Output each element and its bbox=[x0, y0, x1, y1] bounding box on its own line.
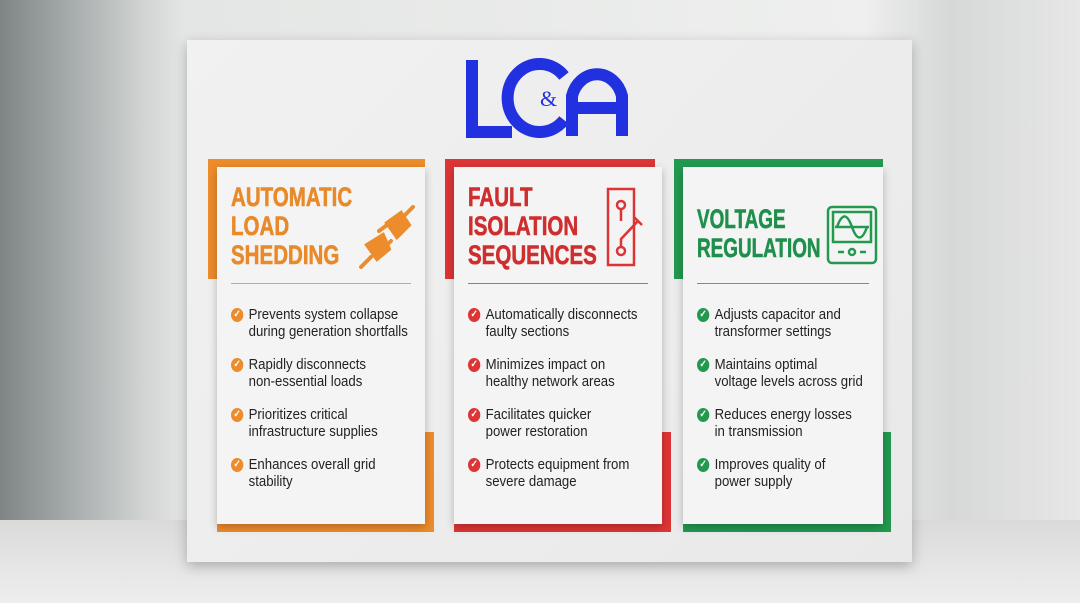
panel: automatic load shedding: non-essential loads bbox=[249, 373, 362, 390]
panel: automatic load shedding: Prioritizes critical bbox=[249, 406, 348, 423]
panel: voltage regulation: Improves quality of bbox=[715, 456, 825, 473]
panel: fault isolation sequences: Protects equipment from bbox=[486, 456, 629, 473]
panel: voltage regulation: voltage levels across grid bbox=[715, 373, 863, 390]
panel: fault isolation sequences: ✓ bbox=[470, 359, 478, 370]
panel: voltage regulation bbox=[674, 159, 891, 532]
panel: fault isolation sequences: Facilitates quicker bbox=[486, 406, 591, 423]
panel: automatic load shedding: during generation shortfalls bbox=[249, 323, 408, 340]
panel: fault isolation sequences: faulty sections bbox=[486, 323, 569, 340]
panel: automatic load shedding: Rapidly disconnects bbox=[249, 356, 366, 373]
panel: fault isolation sequences: severe damage bbox=[486, 473, 577, 490]
heading: FAULT bbox=[468, 182, 533, 212]
panel: voltage regulation: Adjusts capacitor and bbox=[715, 306, 841, 323]
heading: LOAD bbox=[231, 211, 289, 241]
panel: automatic load shedding: infrastructure supplies bbox=[249, 423, 378, 440]
heading: ISOLATION bbox=[468, 211, 578, 241]
heading: REGULATION bbox=[697, 233, 821, 263]
panel: voltage regulation: in transmission bbox=[715, 423, 803, 440]
panel: voltage regulation: ✓ bbox=[699, 309, 707, 320]
board bbox=[187, 40, 912, 562]
logo bbox=[466, 58, 628, 138]
icon: meter bbox=[826, 206, 878, 264]
panel: voltage regulation: ✓ bbox=[699, 459, 707, 470]
heading: VOLTAGE bbox=[697, 204, 786, 234]
panel: automatic load shedding: ✓ bbox=[233, 359, 241, 370]
heading: AUTOMATIC bbox=[231, 182, 352, 212]
panel: automatic load shedding: ✓ bbox=[233, 409, 241, 420]
panel: automatic load shedding: stability bbox=[249, 473, 293, 490]
panel: fault isolation sequences: ✓ bbox=[470, 459, 478, 470]
panel: automatic load shedding: ✓ bbox=[233, 309, 241, 320]
heading: SEQUENCES bbox=[468, 240, 597, 270]
panel: voltage regulation: power supply bbox=[715, 473, 792, 490]
icon: switch bbox=[606, 188, 643, 266]
heading bbox=[468, 182, 597, 270]
heading: SHEDDING bbox=[231, 240, 339, 270]
panel: automatic load shedding bbox=[208, 159, 434, 532]
panel: fault isolation sequences: power restoration bbox=[486, 423, 588, 440]
panel: fault isolation sequences: healthy network areas bbox=[486, 373, 615, 390]
panel: fault isolation sequences: ✓ bbox=[470, 409, 478, 420]
panel: voltage regulation: Reduces energy losses bbox=[715, 406, 852, 423]
panel: voltage regulation: transformer settings bbox=[715, 323, 831, 340]
heading bbox=[231, 182, 352, 270]
icon: plug bbox=[358, 205, 416, 270]
panel: fault isolation sequences bbox=[445, 159, 671, 532]
panel: voltage regulation: ✓ bbox=[699, 409, 707, 420]
panel: fault isolation sequences: Automatically disconnects bbox=[486, 306, 637, 323]
panel: fault isolation sequences: ✓ bbox=[470, 309, 478, 320]
panel: automatic load shedding: ✓ bbox=[233, 459, 241, 470]
panel: voltage regulation: Maintains optimal bbox=[715, 356, 817, 373]
heading bbox=[696, 204, 821, 263]
logo: & bbox=[540, 86, 557, 111]
panel: automatic load shedding: Prevents system collapse bbox=[249, 306, 398, 323]
panel: automatic load shedding: Enhances overall grid bbox=[249, 456, 376, 473]
panel: voltage regulation: ✓ bbox=[699, 359, 707, 370]
panel: fault isolation sequences: Minimizes impact on bbox=[486, 356, 605, 373]
